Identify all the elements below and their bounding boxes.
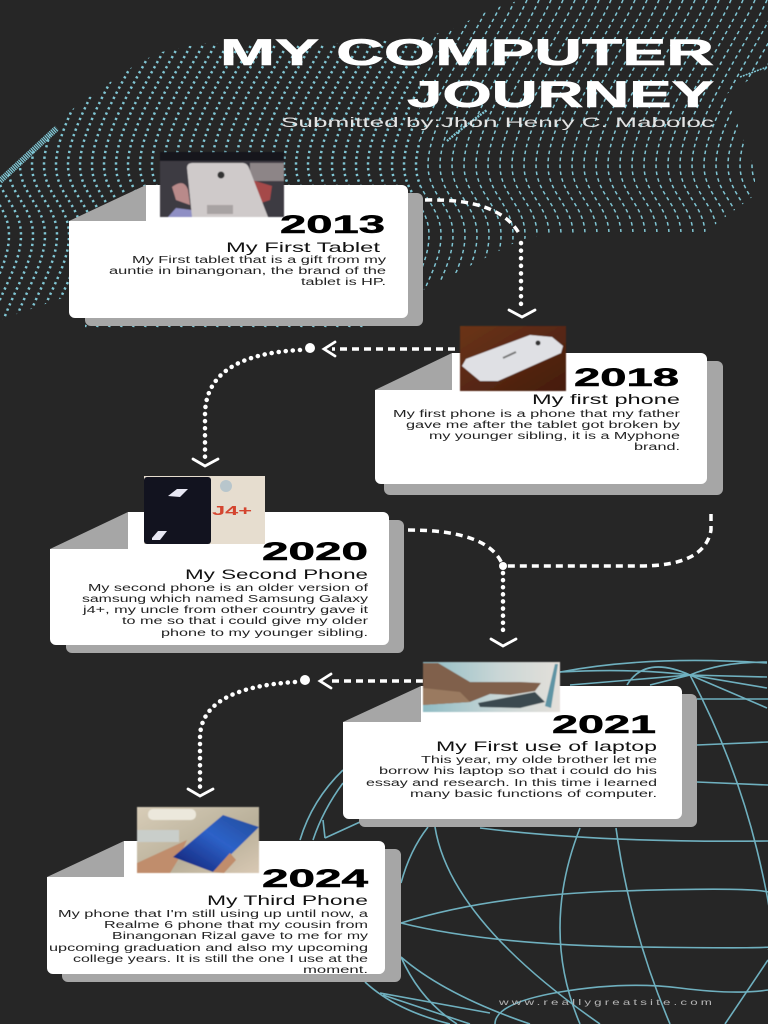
arrow: 2021 to 2024 xyxy=(188,674,423,796)
description: My phone that I'm still using up until now, a xyxy=(58,909,369,920)
photo: HP tablet xyxy=(160,152,284,217)
year: 2018 xyxy=(574,364,679,392)
year: 2020 xyxy=(262,538,368,566)
photo: hands on laptop xyxy=(423,662,560,712)
card body xyxy=(343,686,682,819)
title: MY COMPUTER xyxy=(220,32,714,73)
description: Realme 6 phone that my cousin from xyxy=(104,920,368,931)
description: college years. It is still the one I use at the xyxy=(73,954,369,965)
description xyxy=(393,409,681,453)
card shadow xyxy=(384,361,723,495)
description xyxy=(366,755,658,800)
description xyxy=(49,909,369,976)
card shadow xyxy=(62,849,401,982)
description: My first phone is a phone that my father xyxy=(393,409,681,420)
description: my younger sibling, it is a Myphone xyxy=(429,431,681,442)
year: 2013 xyxy=(280,211,385,239)
panel: 2013 xyxy=(69,152,423,326)
card shadow xyxy=(85,193,423,326)
heading: My first phone xyxy=(532,391,680,407)
description: essay and research. In this time i learned xyxy=(366,778,657,789)
description: This year, my olde brother let me xyxy=(421,755,658,766)
heading: My First Tablet xyxy=(226,239,380,255)
card body xyxy=(375,353,707,484)
description: samsung which named Samsung Galaxy xyxy=(82,594,368,605)
subtitle: Submitted by:Jhon Henry C. Maboloc xyxy=(281,114,714,130)
description: My second phone is an older version of xyxy=(88,583,368,594)
panel: 2021 xyxy=(343,662,697,827)
description xyxy=(109,255,387,288)
description: My First tablet that is a gift from my xyxy=(132,255,386,266)
description: moment. xyxy=(303,965,368,976)
description: j4+, my uncle from other country gave it xyxy=(81,605,368,616)
heading: My First use of laptop xyxy=(436,738,657,754)
description: borrow his laptop so that i could do his xyxy=(379,766,657,777)
heading: My Third Phone xyxy=(207,892,368,908)
description: many basic functions of computer. xyxy=(410,789,657,800)
description: tablet is HP. xyxy=(301,277,386,288)
panel: 2018 xyxy=(375,326,723,495)
photo: Samsung J4+ and box xyxy=(144,476,265,544)
folded corner xyxy=(50,512,128,549)
description: Binangonan Rizal gave to me for my xyxy=(112,931,368,942)
description: phone to my younger sibling. xyxy=(161,628,368,639)
folded corner xyxy=(47,841,124,877)
card shadow xyxy=(359,694,697,827)
folded corner xyxy=(375,353,452,390)
arrow: 2020 to 2021 xyxy=(408,514,711,646)
arrow: 2013 to 2018 xyxy=(425,200,535,317)
description: upcoming graduation and also my upcoming xyxy=(49,943,368,954)
card body xyxy=(50,512,389,645)
description: gave me after the tablet got broken by xyxy=(406,420,680,431)
year: 2021 xyxy=(552,711,656,739)
card shadow xyxy=(66,520,404,653)
description: brand. xyxy=(634,442,680,453)
photo: Samsung J4+ and box: J4+ xyxy=(212,503,253,518)
folded corner xyxy=(343,686,421,722)
description: to me so that i could give my older xyxy=(122,616,369,627)
footer website: www.reallygreatsite.com xyxy=(497,997,715,1007)
folded corner xyxy=(69,185,146,221)
photo: white phone on wood xyxy=(460,326,566,391)
title: JOURNEY xyxy=(407,74,715,115)
dotted wave background xyxy=(0,0,768,330)
heading: My Second Phone xyxy=(185,566,368,582)
description xyxy=(81,583,369,639)
card body xyxy=(47,841,385,974)
year: 2024 xyxy=(262,865,368,893)
globe line art xyxy=(300,660,768,1024)
title xyxy=(220,32,715,115)
arrow: 2018 to 2020 xyxy=(193,342,455,466)
description: auntie in binangonan, the brand of the xyxy=(109,266,387,277)
card body xyxy=(69,185,408,318)
panel: 2020 xyxy=(50,476,404,653)
photo: Realme phone in hand xyxy=(137,807,259,873)
panel: 2024 xyxy=(47,807,401,982)
